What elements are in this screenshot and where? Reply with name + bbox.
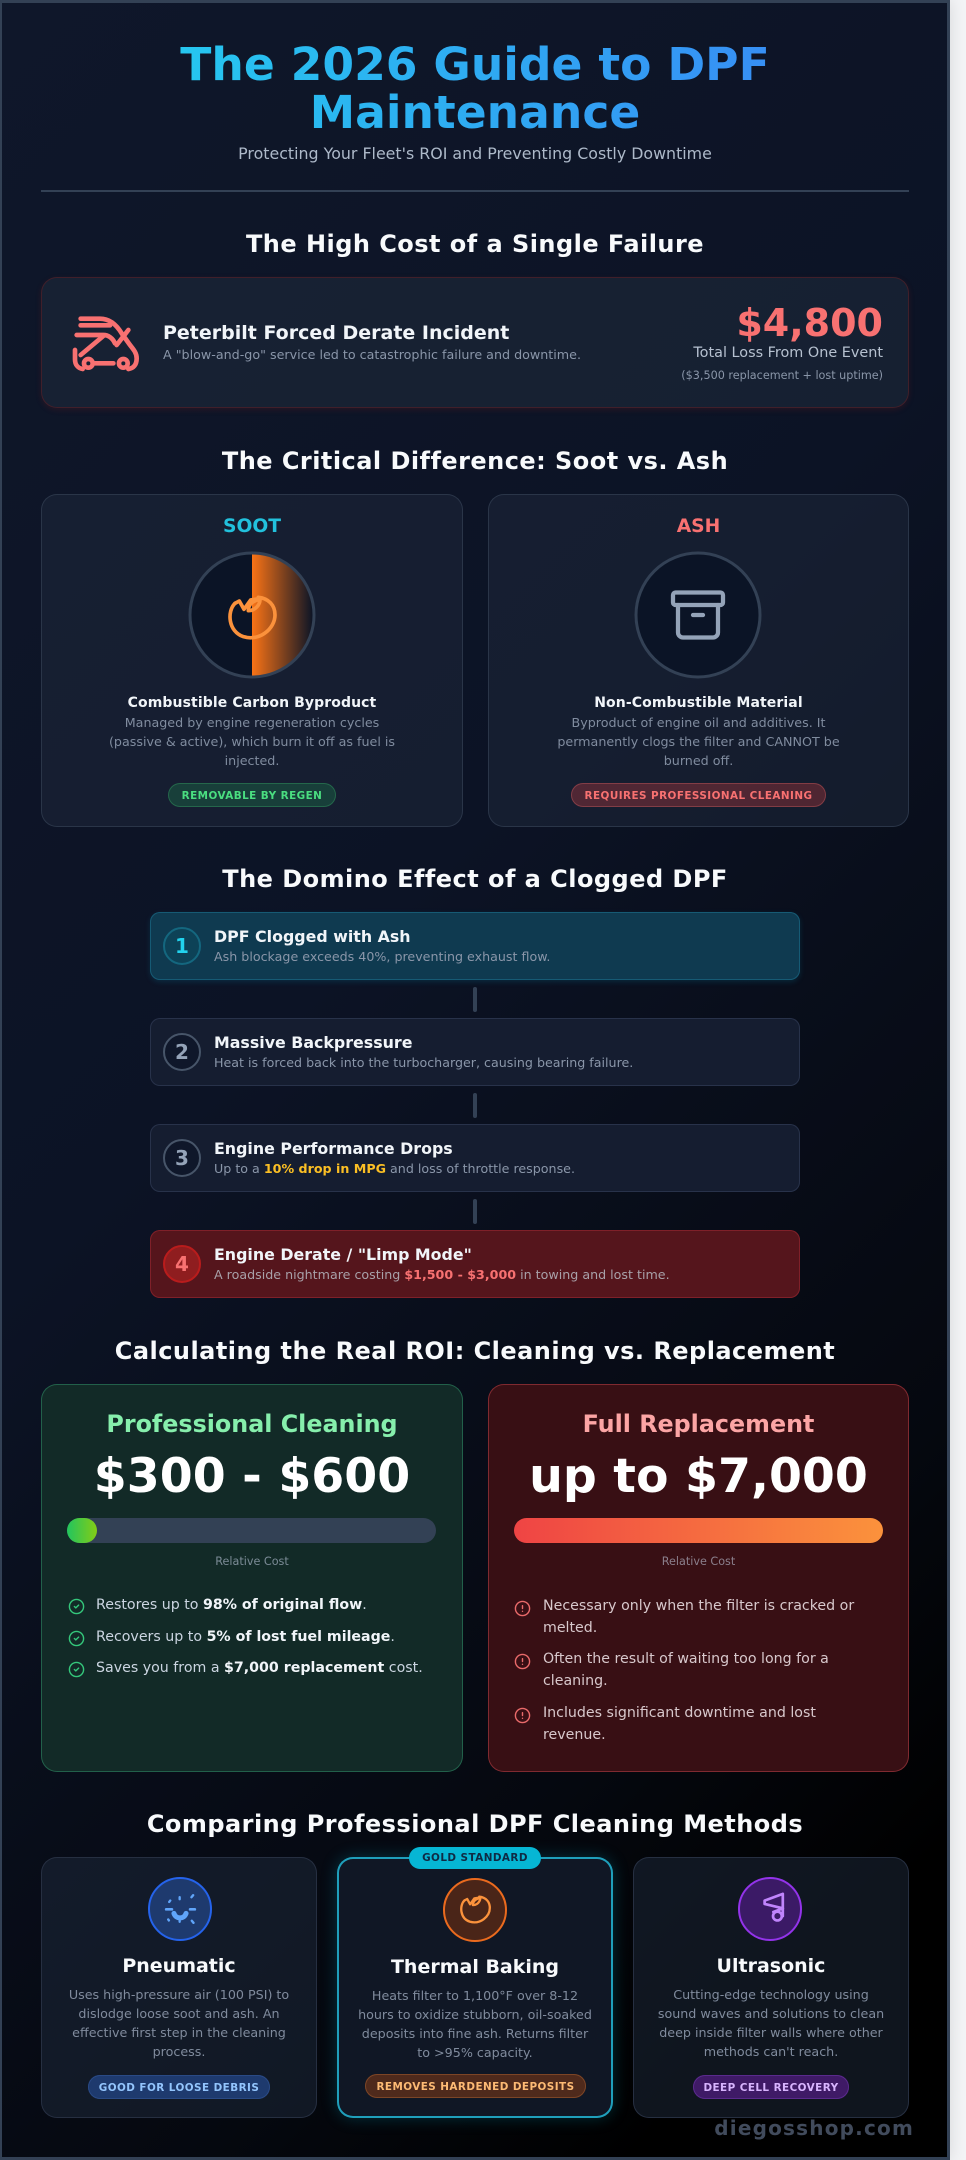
step 2 [150, 1018, 800, 1086]
ultrasonic badge [693, 2075, 849, 2099]
icon: pneumatic air [148, 1877, 212, 1941]
gold standard badge [409, 1847, 541, 1869]
pneumatic title: Pneumatic [122, 1954, 236, 1976]
ash description: permanently clogs the filter and CANNOT be [557, 734, 840, 749]
relative cost bar [514, 1518, 883, 1543]
connector 1 [473, 987, 477, 1012]
panel: soot [41, 494, 463, 827]
pneumatic description: process. [153, 2044, 205, 2058]
ash description: Byproduct of engine oil and additives. It [572, 715, 825, 730]
benefit 3: Saves you from a $7,000 replacement cost. [96, 1660, 423, 1676]
heading: domino effect: The Domino Effect of a Clogged DPF [222, 864, 728, 892]
panel: pneumatic [41, 1857, 317, 2118]
gold standard badge: GOLD STANDARD [422, 1852, 528, 1864]
step number 4: 4 [175, 1252, 189, 1276]
icon: thermal flame [443, 1878, 507, 1942]
thermal description: deposits into fine ash. Returns filter [362, 2026, 588, 2040]
panel: ultrasonic [633, 1857, 909, 2118]
heading: high cost: The High Cost of a Single Failure [246, 230, 704, 258]
icon: truck [72, 316, 139, 372]
icon: half burning soot circle [188, 552, 316, 678]
ultrasonic description: methods can't reach. [704, 2044, 838, 2058]
soot description: injected. [225, 753, 279, 768]
step 3 text: Up to a 10% drop in MPG and loss of throttle response. [214, 1161, 575, 1176]
thermal description [358, 1988, 592, 2060]
cleaning title: Professional Cleaning [106, 1410, 398, 1438]
step number 3: 3 [175, 1146, 189, 1170]
benefit 2: Recovers up to 5% of lost fuel mileage. [96, 1629, 395, 1645]
connector 3 [473, 1199, 477, 1224]
panel: full replacement [488, 1384, 909, 1772]
step 3 [150, 1124, 800, 1192]
ash heading: Non-Combustible Material [594, 694, 803, 710]
step 2 title: Massive Backpressure [214, 1033, 412, 1052]
replacement price: up to $7,000 [529, 1449, 868, 1504]
soot badge [168, 783, 336, 807]
pneumatic description: Uses high-pressure air (100 PSI) to [69, 1986, 289, 2002]
title: The 2026 Guide to DPF [180, 38, 770, 91]
incident title: Peterbilt Forced Derate Incident [163, 322, 509, 344]
step number 3 [163, 1139, 201, 1177]
loss breakdown: ($3,500 replacement + lost uptime) [681, 369, 883, 382]
subtitle: Protecting Your Fleet's ROI and Preventing Costly Downtime [238, 144, 712, 163]
heading: cleaning methods: Comparing Professional DPF Cleaning Methods [147, 1810, 803, 1838]
soot description: Managed by engine regeneration cycles [125, 715, 379, 730]
cleaning price: $300 - $600 [94, 1449, 410, 1504]
step 4 text: A roadside nightmare costing $1,500 - $3,000 in towing and lost time. [214, 1267, 670, 1282]
soot description: (passive & active), which burn it off as fuel is [109, 734, 395, 749]
heading: soot vs ash: The Critical Difference: Soot vs. Ash [222, 446, 728, 474]
thermal description: hours to oxidize stubborn, oil-soaked [358, 2006, 592, 2022]
ash description: burned off. [664, 753, 733, 768]
pneumatic description [69, 1986, 289, 2058]
drawback 1 [514, 1598, 854, 1636]
step 1 title: DPF Clogged with Ash [214, 927, 411, 946]
ash badge [571, 783, 826, 807]
soot description [109, 715, 395, 768]
title [41, 41, 909, 137]
drawback 1: Necessary only when the filter is cracked or [543, 1598, 854, 1614]
ultrasonic description [658, 1986, 884, 2058]
ultrasonic title: Ultrasonic [717, 1954, 825, 1976]
ultrasonic badge: DEEP CELL RECOVERY [703, 2082, 839, 2094]
thermal badge [365, 2074, 586, 2098]
step number 4 [163, 1245, 201, 1283]
total loss caption: Total Loss From One Event [693, 344, 883, 360]
soot badge: REMOVABLE BY REGEN [182, 790, 322, 802]
pneumatic description: effective first step in the cleaning [72, 2024, 286, 2040]
drawback 3: revenue. [543, 1726, 606, 1742]
ash badge: REQUIRES PROFESSIONAL CLEANING [585, 790, 812, 802]
ultrasonic description: Cutting-edge technology using [673, 1986, 869, 2002]
drawback 2: Often the result of waiting too long for a [543, 1650, 829, 1666]
step 4 [150, 1230, 800, 1298]
relative cost bar [67, 1518, 436, 1543]
step 4 title: Engine Derate / "Limp Mode" [214, 1245, 472, 1264]
thermal description: Heats filter to 1,100°F over 8-12 [372, 1988, 578, 2002]
ultrasonic description: deep inside filter walls where other [659, 2024, 883, 2040]
replacement title: Full Replacement [583, 1410, 814, 1438]
icon: ultrasonic waves [738, 1877, 802, 1941]
total loss figure: $4,800 [736, 301, 883, 345]
title: Maintenance [310, 86, 640, 139]
drawback 3 [514, 1704, 816, 1742]
panel: failure incident [41, 277, 909, 408]
icon: ash archive box [634, 552, 762, 678]
watermark: diegosshop.com [714, 2116, 914, 2140]
thermal title: Thermal Baking [391, 1956, 559, 1978]
step number 1: 1 [175, 934, 189, 958]
step number 2: 2 [175, 1040, 189, 1064]
ash description [557, 715, 840, 768]
benefit 1: Restores up to 98% of original flow. [96, 1597, 367, 1613]
incident description: A "blow-and-go" service led to catastrophic failure and downtime. [163, 347, 581, 362]
panel: thermal baking [337, 1857, 613, 2118]
soot heading: Combustible Carbon Byproduct [128, 694, 376, 710]
panel: professional cleaning [41, 1384, 463, 1772]
bar caption: Relative Cost [215, 1555, 289, 1568]
ash label: ASH [677, 516, 720, 537]
pneumatic badge: GOOD FOR LOOSE DEBRIS [99, 2082, 259, 2094]
step number 2 [163, 1033, 201, 1071]
thermal description: to >95% capacity. [417, 2044, 533, 2060]
bar caption: Relative Cost [662, 1555, 735, 1568]
drawback 1: melted. [543, 1620, 597, 1636]
drawback 2 [514, 1650, 829, 1688]
step 3 title: Engine Performance Drops [214, 1139, 453, 1158]
connector 2 [473, 1093, 477, 1118]
panel: ash [488, 494, 909, 827]
step 1 [150, 912, 800, 980]
step number 1 [163, 927, 201, 965]
ultrasonic description: sound waves and solutions to clean [658, 2006, 884, 2020]
pneumatic badge [88, 2075, 270, 2099]
thermal badge: REMOVES HARDENED DEPOSITS [376, 2081, 575, 2093]
soot label: SOOT [223, 516, 281, 537]
drawback 2: cleaning. [543, 1672, 608, 1688]
step 2 text: Heat is forced back into the turbocharger, causing bearing failure. [214, 1055, 633, 1070]
bar fill [67, 1518, 97, 1543]
pneumatic description: dislodge loose soot and ash. An [78, 2006, 280, 2020]
step 1 text: Ash blockage exceeds 40%, preventing exhaust flow. [214, 949, 550, 964]
heading: roi: Calculating the Real ROI: Cleaning vs. Replacement [115, 1336, 835, 1364]
drawback 3: Includes significant downtime and lost [543, 1704, 816, 1720]
